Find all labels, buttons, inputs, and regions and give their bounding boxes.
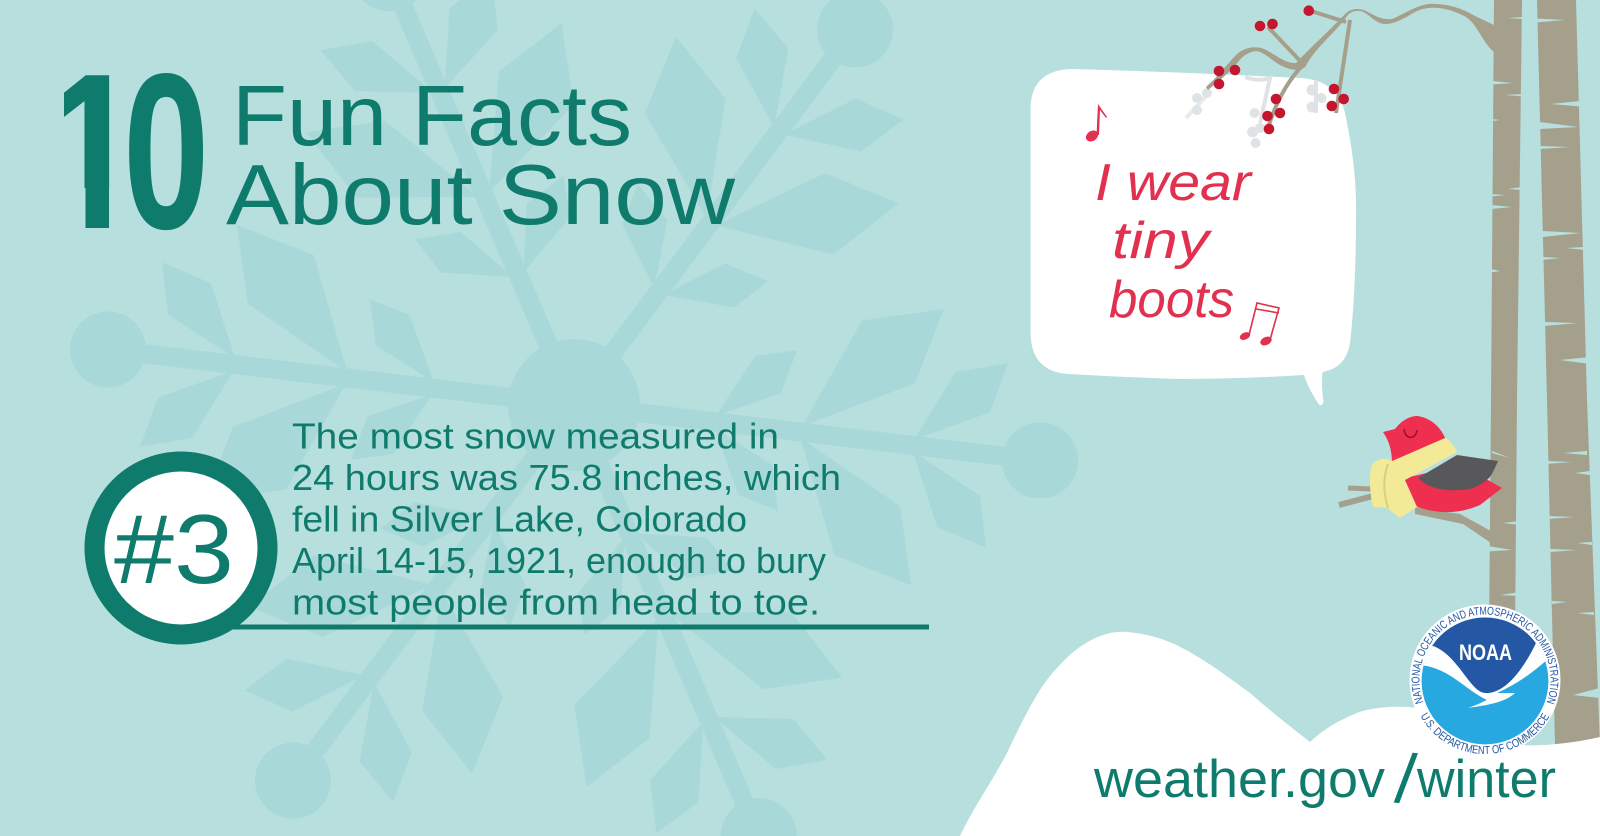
title line 2: About Snow <box>226 148 736 243</box>
bubble text: tiny <box>1112 212 1213 270</box>
snow hill <box>960 632 1600 836</box>
NOAA logo <box>1410 604 1560 754</box>
tree trunk left <box>1488 0 1523 640</box>
NOAA logo: NATIONAL OCEANIC AND ATMOSPHERIC ADMINISTRATION <box>1412 606 1558 704</box>
fact text: 24 hours was 75.8 inches, which <box>292 457 841 498</box>
fact number badge <box>84 452 929 644</box>
bubble text: I wear <box>1095 154 1254 212</box>
fact text <box>292 416 841 622</box>
branch shadow on bubble <box>1186 77 1326 148</box>
website url: / <box>1392 739 1420 819</box>
NOAA logo: U.S. DEPARTMENT OF COMMERCE <box>1422 712 1550 754</box>
bird on perch <box>1339 416 1502 543</box>
background snowflake <box>70 0 1078 836</box>
branch with berries <box>1206 4 1494 134</box>
bubble text <box>1095 154 1254 329</box>
bubble text: boots <box>1109 271 1234 329</box>
title number 0: 0 <box>123 28 209 276</box>
title number 1: 1 <box>42 28 142 276</box>
title line 1: Fun Facts <box>232 69 632 164</box>
bird eye <box>1404 429 1417 437</box>
website url <box>1093 739 1556 819</box>
speech bubble <box>1031 69 1356 405</box>
fact number badge: #3 <box>114 494 234 604</box>
bird head <box>1383 416 1446 463</box>
bird body <box>1405 470 1502 512</box>
tree trunk right <box>1536 0 1600 745</box>
title <box>64 73 736 230</box>
icon: double music note <box>1239 303 1279 347</box>
bird wing <box>1418 455 1498 490</box>
fact text: April 14-15, 1921, enough to bury <box>292 540 826 581</box>
website url: weather.gov <box>1093 750 1386 809</box>
scarf <box>1370 438 1457 518</box>
fact text: fell in Silver Lake, Colorado <box>292 498 747 540</box>
icon: single music note <box>1084 104 1107 144</box>
perch branch <box>1339 488 1491 543</box>
website url: winter <box>1416 750 1556 809</box>
fact text: The most snow measured in <box>292 416 779 456</box>
NOAA logo: NOAA <box>1459 640 1512 665</box>
fact text: most people from head to toe. <box>292 582 820 622</box>
